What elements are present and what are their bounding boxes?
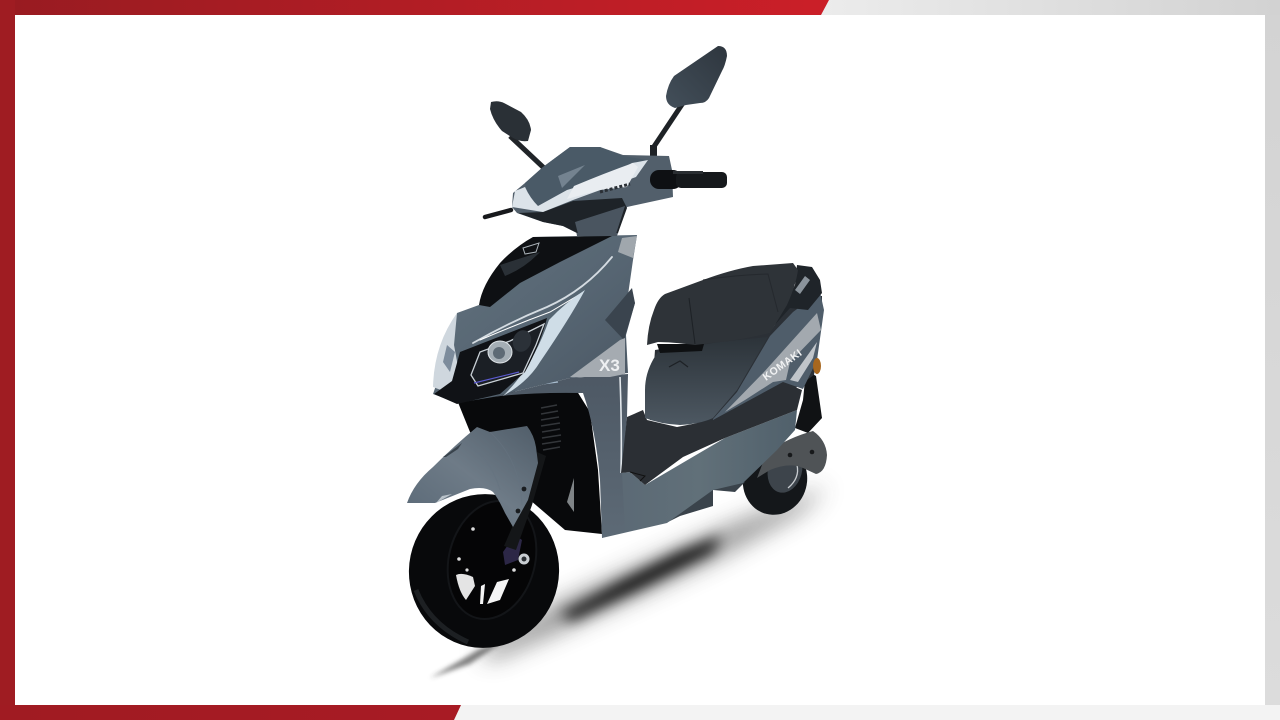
scooter illustration	[395, 46, 827, 662]
right mirror stem	[650, 100, 685, 156]
left mirror stem	[510, 136, 544, 168]
shield right dark inset	[605, 288, 635, 340]
front shield panel	[433, 235, 637, 403]
right mirror	[666, 46, 727, 108]
top silver accent	[618, 236, 637, 258]
tyre	[395, 480, 573, 662]
trunk logo	[669, 361, 688, 367]
dark top console	[479, 236, 612, 307]
headlight lens	[567, 163, 638, 199]
X3 badge: X3	[599, 356, 620, 375]
ground shadow	[430, 486, 828, 678]
glove vent	[500, 252, 540, 276]
front interior and fork shadow	[455, 388, 602, 534]
frame: red bottom band	[0, 705, 461, 720]
tail section	[772, 265, 822, 328]
handlebar cowl	[512, 147, 673, 233]
disc brake hub	[503, 535, 522, 565]
lower side body	[602, 410, 797, 538]
headlamp unit	[471, 324, 544, 386]
rear black mudguard	[795, 370, 822, 433]
left handle lever	[485, 210, 511, 217]
main lens	[488, 341, 512, 363]
leg shield white trim	[620, 377, 621, 473]
badge	[523, 243, 539, 254]
underbody shade	[668, 482, 745, 522]
headlamp face	[434, 318, 547, 404]
cowl lower dark	[518, 198, 627, 233]
brand text: KOMAKI	[761, 347, 805, 383]
rear grey bracket	[757, 431, 827, 478]
white DRL swoosh	[512, 160, 648, 212]
X3 silver panel	[570, 338, 625, 377]
rim	[435, 491, 549, 629]
amber reflector	[813, 358, 821, 374]
frame: red left band	[0, 0, 15, 720]
fork spring	[541, 405, 561, 450]
left indicator lens	[433, 313, 459, 392]
front fender	[407, 426, 538, 527]
inner grey reflection	[567, 478, 574, 512]
chrome swoosh lines	[473, 257, 612, 343]
seat	[647, 263, 798, 345]
floorboard	[621, 382, 802, 485]
right grip	[650, 170, 727, 189]
LED strip	[600, 184, 630, 192]
under-seat trunk	[645, 337, 768, 425]
rear body backing	[650, 295, 822, 425]
frame: red top band	[0, 0, 829, 15]
silver stripe	[725, 313, 821, 412]
steering column	[575, 205, 627, 236]
frame: grey top band	[820, 0, 1280, 15]
frame: grey right band	[1265, 15, 1280, 720]
left mirror	[490, 101, 531, 141]
windscreen	[525, 147, 647, 207]
seat shadow gap	[657, 344, 704, 353]
side panel	[713, 292, 824, 420]
leg shield	[493, 374, 628, 538]
second lens	[510, 328, 534, 354]
fork leg	[504, 452, 546, 550]
rear wheel	[735, 438, 815, 522]
front wheel	[395, 480, 573, 662]
frame: pale bottom band	[454, 705, 1280, 720]
headlamp DRL light	[503, 290, 585, 396]
wheel cut-out and caliper	[456, 574, 475, 600]
